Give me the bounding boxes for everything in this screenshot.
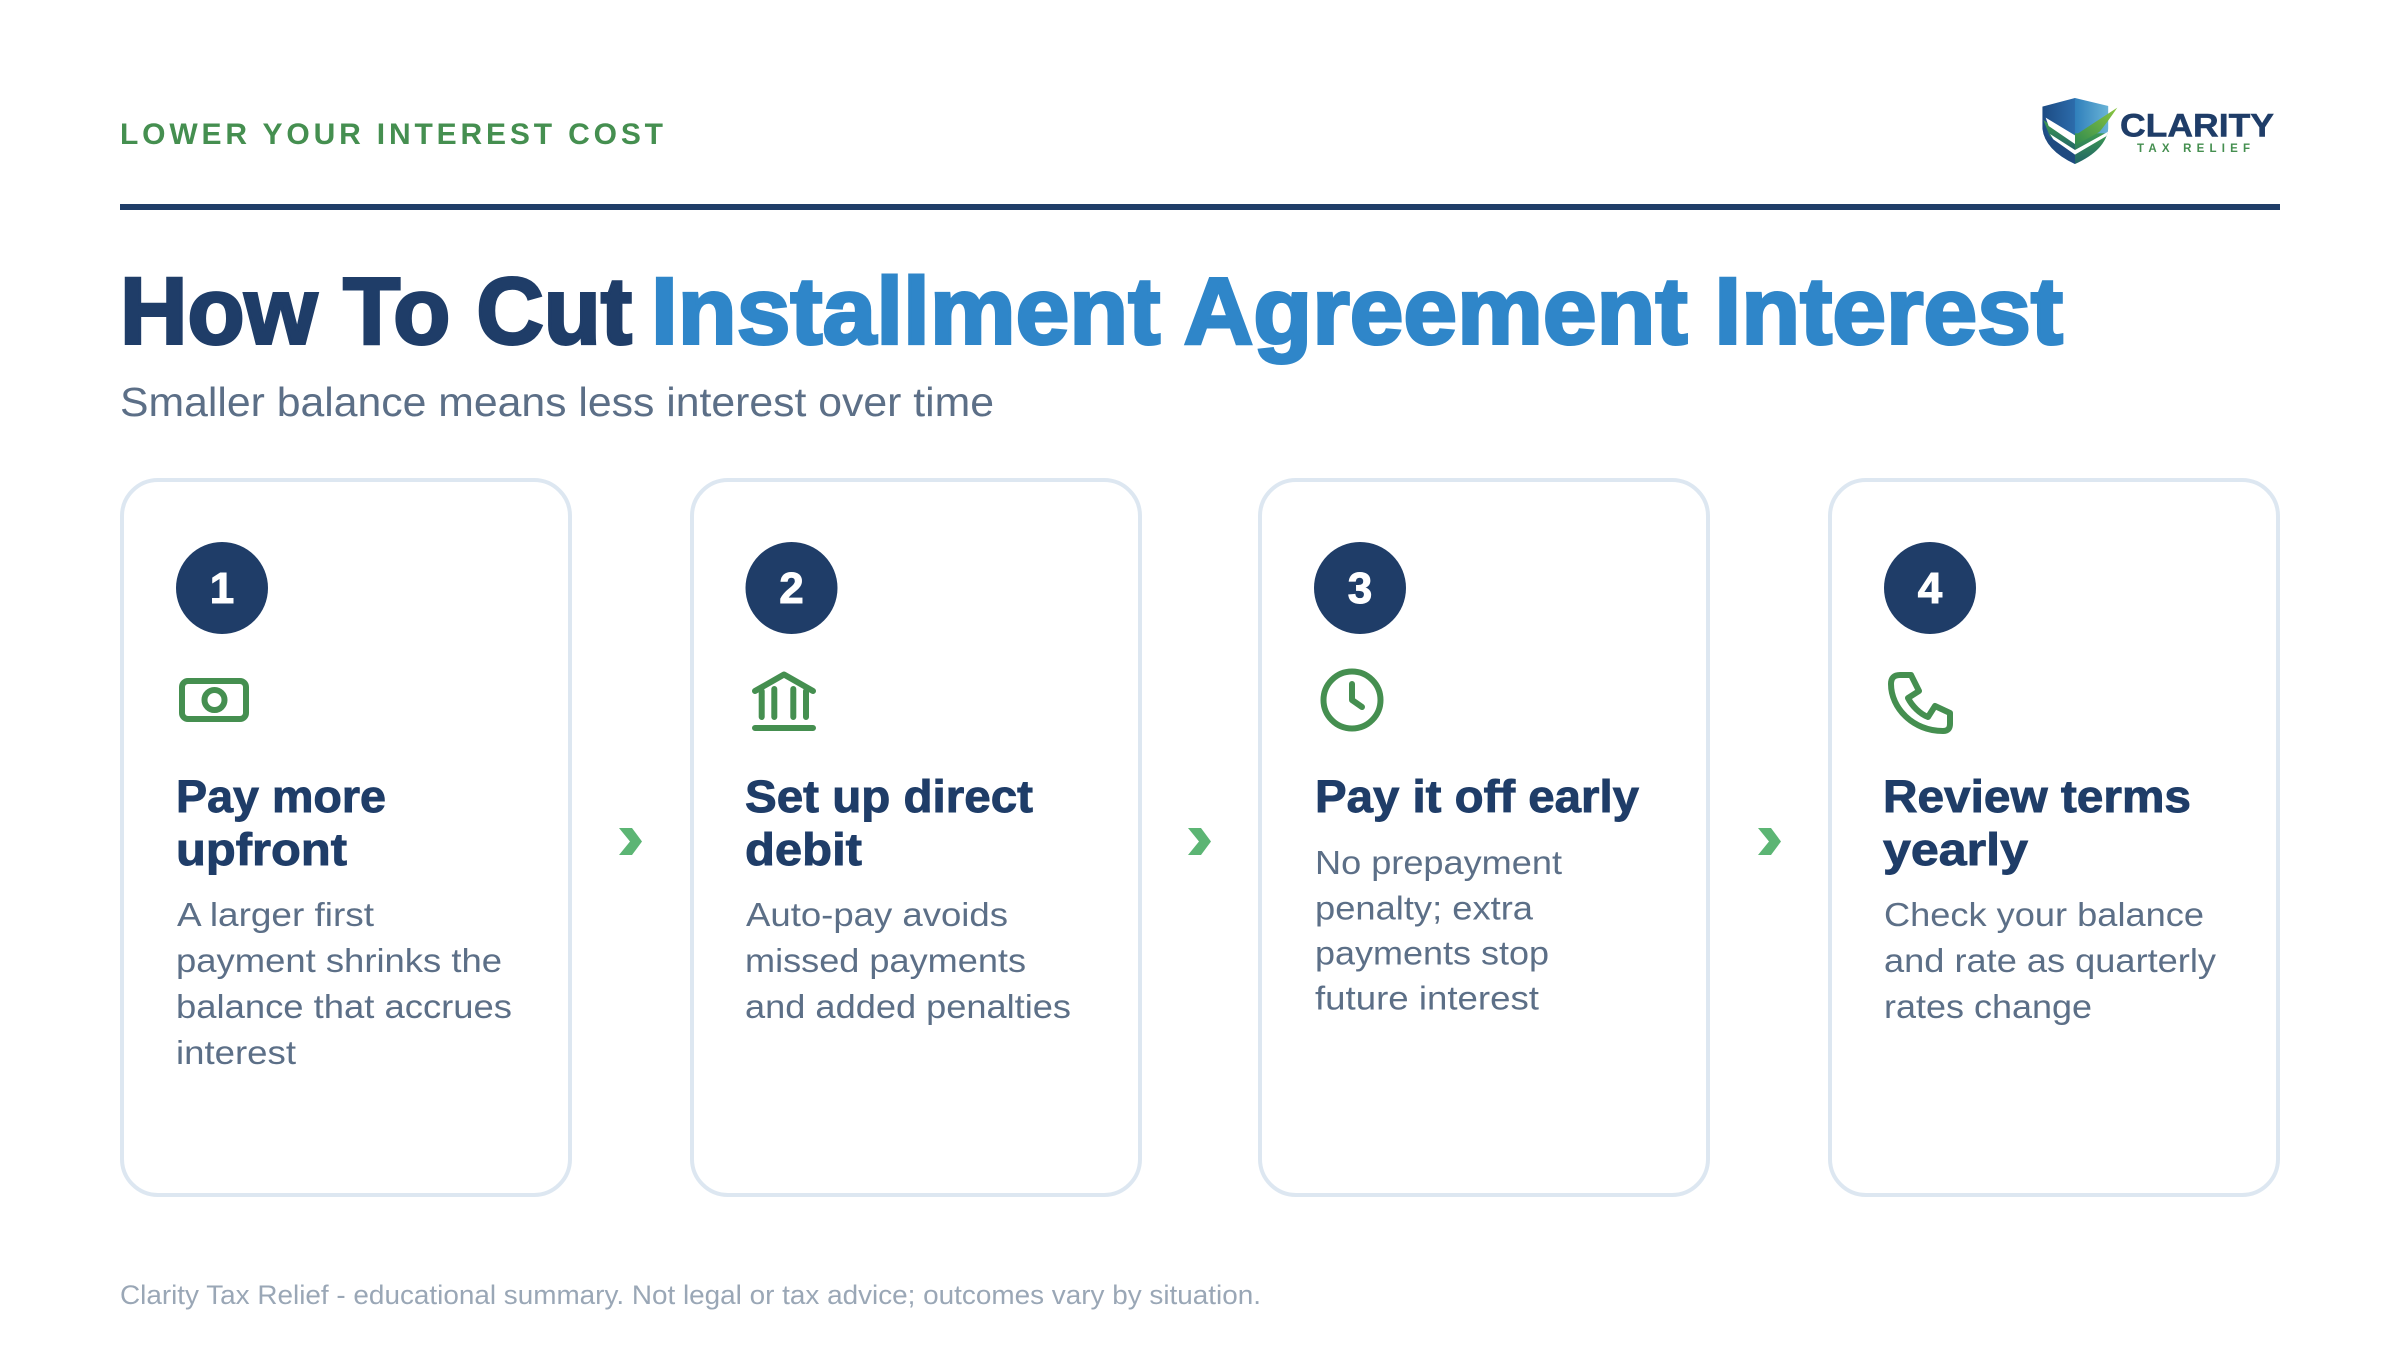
logo: Clarity Tax Relief bbox=[2040, 97, 2274, 167]
step heading: debit bbox=[745, 824, 862, 875]
title part: navy: How To Cut bbox=[120, 258, 632, 364]
step description: payments stop bbox=[1315, 934, 1549, 972]
card outline bbox=[1830, 480, 2278, 1195]
step heading bbox=[1883, 771, 2191, 875]
step description: Check your balance bbox=[1884, 896, 2204, 933]
step heading bbox=[176, 771, 386, 875]
step heading: Pay it off early bbox=[1315, 771, 1639, 822]
step heading: yearly bbox=[1883, 824, 2028, 875]
number badge 2 bbox=[746, 542, 838, 634]
arrow 3 bbox=[1758, 828, 1781, 855]
step description: and added penalties bbox=[745, 988, 1071, 1025]
step heading: Review terms bbox=[1883, 771, 2191, 822]
step heading: Set up direct bbox=[745, 771, 1033, 822]
arrow 2 bbox=[1188, 828, 1211, 855]
panel: step 3 bbox=[1260, 480, 1708, 1195]
logo wordmark: CLARITY bbox=[2120, 108, 2274, 144]
icon: shield with check bbox=[2040, 97, 2117, 167]
panel: step 2 bbox=[692, 480, 1140, 1195]
icon: phone bbox=[1891, 675, 1950, 731]
step description: A larger first bbox=[177, 896, 374, 933]
number badge 1: 1 bbox=[210, 564, 234, 613]
number badge 4 bbox=[1884, 542, 1976, 634]
step description: balance that accrues bbox=[176, 988, 512, 1025]
step description bbox=[1884, 896, 2217, 1025]
step description: and rate as quarterly bbox=[1884, 942, 2217, 979]
arrow 1 bbox=[619, 828, 642, 855]
icon: clock bbox=[1324, 672, 1380, 728]
title part: blue: Installment Agreement Interest bbox=[651, 258, 2063, 364]
panel: step 4 bbox=[1830, 480, 2278, 1195]
subtitle: Smaller balance means less interest over time bbox=[120, 379, 994, 425]
logo tagline: TAX RELIEF bbox=[2137, 143, 2250, 155]
step description: rates change bbox=[1884, 988, 2092, 1025]
card outline bbox=[1260, 480, 1708, 1195]
icon: banknote bbox=[182, 681, 246, 719]
number badge 2: 2 bbox=[779, 564, 804, 613]
step description: missed payments bbox=[745, 942, 1026, 979]
panel: step 1 bbox=[122, 480, 570, 1195]
step description: payment shrinks the bbox=[176, 942, 502, 979]
step description bbox=[745, 896, 1071, 1025]
step description: interest bbox=[176, 1034, 296, 1071]
card outline bbox=[692, 480, 1140, 1195]
step description: future interest bbox=[1315, 980, 1539, 1016]
step description: No prepayment bbox=[1315, 844, 1562, 881]
number badge 3: 3 bbox=[1348, 564, 1372, 613]
step description bbox=[176, 896, 512, 1071]
step description bbox=[1315, 844, 1562, 1016]
number badge 4: 4 bbox=[1918, 564, 1943, 613]
icon: bank bbox=[755, 674, 813, 728]
footer disclaimer: Clarity Tax Relief - educational summary. Not legal or tax advice; outcomes vary by situation. bbox=[120, 1280, 1261, 1310]
number badge 3 bbox=[1314, 542, 1406, 634]
step heading: Pay more bbox=[176, 771, 386, 822]
step heading bbox=[745, 771, 1033, 875]
step description: Auto-pay avoids bbox=[746, 896, 1008, 933]
title bbox=[120, 258, 2063, 364]
card outline bbox=[122, 480, 570, 1195]
step description: penalty; extra bbox=[1315, 890, 1534, 926]
eyebrow heading: LOWER YOUR INTEREST COST bbox=[120, 118, 663, 151]
step heading: upfront bbox=[176, 824, 347, 875]
number badge 1 bbox=[176, 542, 268, 634]
